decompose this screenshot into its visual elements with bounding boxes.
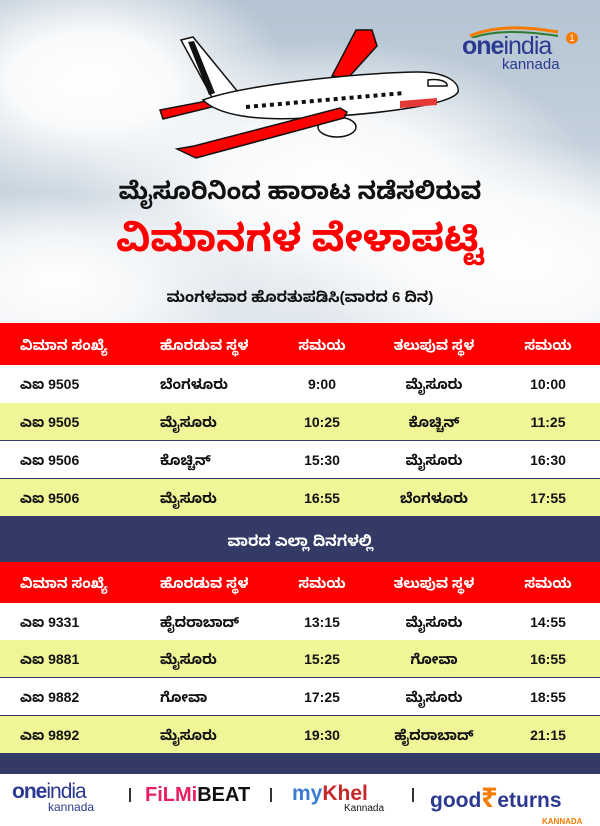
row bbox=[0, 478, 600, 516]
table 2 header: ಸಮಯ bbox=[298, 575, 346, 591]
table 2 header bbox=[0, 562, 600, 603]
table 1 header: ಹೊರಡುವ ಸ್ಥಳ bbox=[160, 336, 248, 352]
background sky bbox=[0, 0, 600, 323]
row: ಬೆಂಗಳೂರು bbox=[160, 376, 228, 392]
row: ಹೈದರಾಬಾದ್ bbox=[394, 726, 474, 742]
row: ಎಐ 9506 bbox=[20, 452, 79, 468]
row bbox=[0, 440, 600, 478]
row: 16:55 bbox=[530, 650, 566, 666]
row: ಮೈಸೂರು bbox=[160, 414, 217, 430]
row: ಮೈಸೂರು bbox=[406, 614, 462, 630]
logo: mykhel: Kannada bbox=[344, 803, 384, 814]
logo: goodreturns bbox=[430, 782, 582, 826]
row: 18:55 bbox=[530, 688, 566, 704]
row: ಎಐ 9505 bbox=[20, 376, 79, 392]
row: 10:00 bbox=[530, 376, 566, 392]
row: 15:25 bbox=[304, 650, 340, 666]
row bbox=[0, 603, 600, 640]
row: ಮೈಸೂರು bbox=[406, 452, 462, 468]
footer logos bbox=[0, 774, 600, 822]
row: 21:15 bbox=[530, 726, 566, 742]
table 2 header: ಸಮಯ bbox=[524, 575, 572, 591]
subtitle: ಮಂಗಳವಾರ ಹೊರತುಪಡಿಸಿ(ವಾರದ 6 ದಿನ) bbox=[167, 289, 433, 306]
row: 13:15 bbox=[304, 614, 340, 630]
table 1 header: ಸಮಯ bbox=[524, 336, 572, 352]
table 1 bbox=[0, 323, 600, 516]
section band: all days: ವಾರದ ಎಲ್ಲಾ ದಿನಗಳಲ್ಲಿ bbox=[227, 533, 373, 550]
row bbox=[0, 403, 600, 440]
row: 9:00 bbox=[308, 376, 336, 392]
row bbox=[0, 715, 600, 753]
table 2 header: ಹೊರಡುವ ಸ್ಥಳ bbox=[160, 575, 248, 591]
row: ಎಐ 9881 bbox=[20, 650, 79, 666]
row: 19:30 bbox=[304, 726, 340, 742]
row: 11:25 bbox=[530, 414, 566, 430]
logo: mykhel: myKhel bbox=[292, 782, 368, 805]
row: 10:25 bbox=[304, 414, 340, 430]
logo: oneindia kannada: 1 bbox=[569, 33, 574, 43]
title main: ವಿಮಾನಗಳ ವೇಳಾಪಟ್ಟಿ bbox=[116, 218, 484, 260]
logo: goodreturns: KANNADA bbox=[542, 817, 582, 826]
row: ಮೈಸೂರು bbox=[160, 726, 217, 742]
logo: filmibeat: FiLMiBEAT bbox=[145, 784, 250, 806]
row: 16:55 bbox=[304, 490, 340, 506]
row: ಎಐ 9506 bbox=[20, 490, 79, 506]
table 1 header bbox=[0, 323, 600, 365]
row: ಮೈಸೂರು bbox=[406, 688, 462, 704]
row: 14:55 bbox=[530, 614, 566, 630]
row: ಕೊಚ್ಚಿನ್ bbox=[160, 452, 211, 468]
logo: oneindia kannada: oneindia bbox=[462, 32, 551, 60]
table 2 header: ತಲುಪುವ ಸ್ಥಳ bbox=[394, 575, 474, 591]
row: ಎಐ 9882 bbox=[20, 688, 79, 704]
row: ಗೋವಾ bbox=[410, 650, 458, 666]
logo: oneindia: kannada bbox=[48, 800, 94, 814]
row: ಎಐ 9892 bbox=[20, 726, 79, 742]
row: 17:55 bbox=[530, 490, 566, 506]
title line 1: ಮೈಸೂರಿನಿಂದ ಹಾರಾಟ ನಡೆಸಲಿರುವ bbox=[119, 178, 481, 205]
section band: all days bbox=[0, 516, 600, 562]
logo: oneindia bbox=[12, 780, 94, 814]
table 1 header: ಸಮಯ bbox=[298, 336, 346, 352]
row: 16:30 bbox=[530, 452, 566, 468]
logo: oneindia kannada bbox=[462, 26, 578, 73]
navy band bbox=[0, 753, 600, 774]
logo: goodreturns: good₹eturns bbox=[430, 782, 562, 813]
row: ಎಐ 9505 bbox=[20, 414, 79, 430]
row: 15:30 bbox=[304, 452, 340, 468]
row bbox=[0, 677, 600, 715]
row: ಎಐ 9331 bbox=[20, 614, 79, 630]
row: ಹೈದರಾಬಾದ್ bbox=[160, 614, 239, 630]
table 1 header: ತಲುಪುವ ಸ್ಥಳ bbox=[394, 336, 474, 352]
logo: oneindia: oneindia bbox=[12, 780, 86, 803]
table 1 header: ವಿಮಾನ ಸಂಖ್ಯೆ bbox=[20, 336, 108, 352]
logo: oneindia kannada: kannada bbox=[502, 56, 560, 73]
table 2 header: ವಿಮಾನ ಸಂಖ್ಯೆ bbox=[20, 575, 108, 591]
logo: mykhel bbox=[292, 782, 384, 814]
row bbox=[0, 365, 600, 403]
row: 17:25 bbox=[304, 688, 340, 704]
row bbox=[0, 640, 600, 677]
row: ಕೊಚ್ಚಿನ್ bbox=[409, 414, 459, 430]
row: ಮೈಸೂರು bbox=[160, 650, 217, 666]
row: ಬೆಂಗಳೂರು bbox=[400, 490, 468, 506]
row: ಮೈಸೂರು bbox=[406, 376, 462, 392]
row: ಮೈಸೂರು bbox=[160, 490, 217, 506]
illustration: airplane bbox=[159, 29, 459, 159]
row: ಗೋವಾ bbox=[160, 688, 207, 704]
table 2 bbox=[0, 562, 600, 753]
